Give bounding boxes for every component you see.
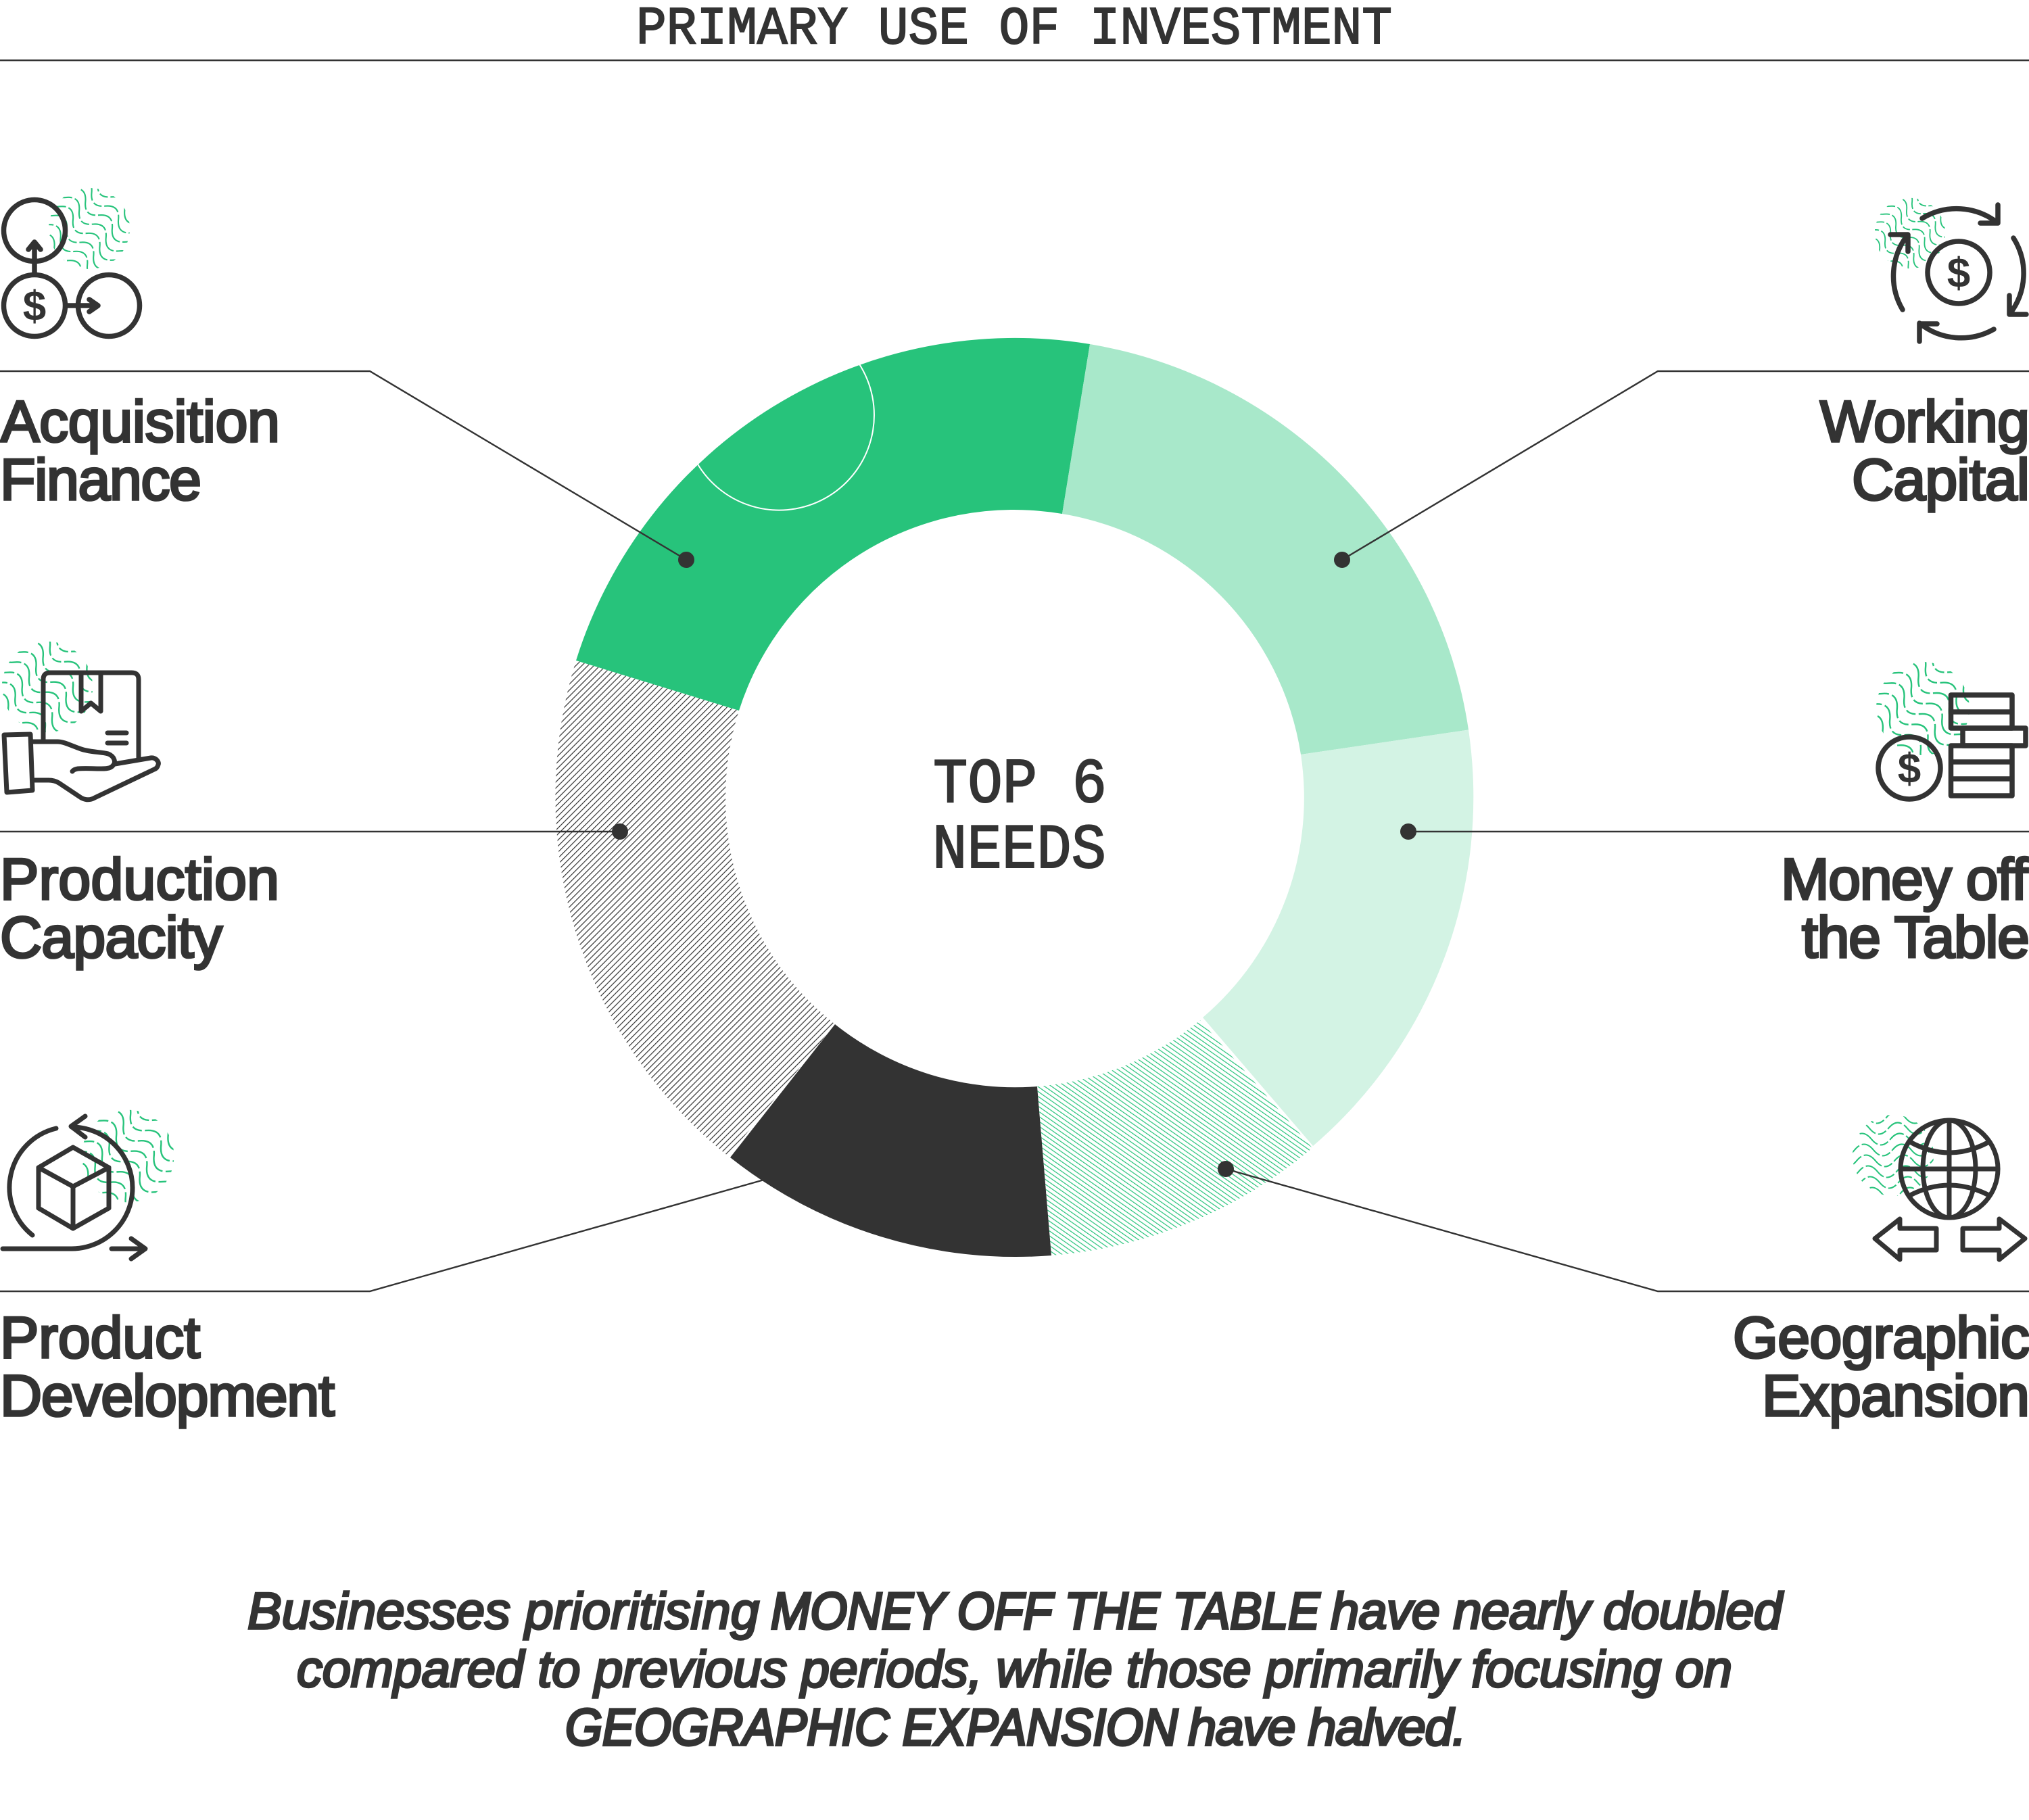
leader line: acquisition finance xyxy=(0,371,694,568)
label: production capacity: Production xyxy=(0,847,279,912)
segment arc decoration xyxy=(697,363,874,510)
leader line: product development xyxy=(0,1180,764,1291)
footnote text: MONEY OFF THE TABLE xyxy=(771,1583,1320,1640)
label: working capital: Working xyxy=(1820,389,2029,454)
label: acquisition finance: Finance xyxy=(0,448,201,512)
donut centre label: TOP 6 xyxy=(933,750,1107,821)
icon: working capital cycle xyxy=(1832,155,2026,341)
segment: money off the table xyxy=(1203,730,1473,1146)
label: acquisition finance xyxy=(0,389,280,512)
donut chart xyxy=(555,338,1473,1257)
leader line: working capital xyxy=(1334,371,2029,568)
label: acquisition finance: Acquisition xyxy=(1,389,280,454)
leader line: geographic expansion xyxy=(1218,1161,2029,1291)
icon: money off the table coins: $ xyxy=(1898,746,1921,792)
label: production capacity: Capacity xyxy=(0,905,222,970)
footnote text: have halved. xyxy=(1188,1699,1466,1756)
label: geographic expansion: Geographic xyxy=(1733,1306,2029,1370)
segment: product development xyxy=(730,1024,1051,1257)
icon: acquisition finance circles xyxy=(0,139,192,337)
icon: product development cube xyxy=(3,1055,245,1274)
leader line: money off the table xyxy=(1400,823,2029,840)
label: geographic expansion xyxy=(1733,1306,2029,1429)
donut centre label xyxy=(932,750,1107,887)
icon: working capital cycle: $ xyxy=(1947,250,1970,297)
segment: acquisition finance xyxy=(576,338,1090,711)
label: production capacity xyxy=(0,847,279,970)
leader line: production capacity xyxy=(0,823,628,840)
footnote text: Businesses prioritising xyxy=(247,1583,759,1640)
label: product development: Product xyxy=(0,1306,200,1370)
segment: working capital xyxy=(1062,344,1469,755)
label: working capital xyxy=(1820,389,2029,512)
footnote text: compared to previous periods, while those primarily focusing on xyxy=(297,1641,1732,1698)
icon: money off the table coins xyxy=(1820,606,2029,827)
label: product development xyxy=(0,1306,335,1429)
icon: geographic expansion globe xyxy=(1811,1111,2025,1260)
label: money off the table: Money off xyxy=(1781,847,2028,912)
segment: production capacity xyxy=(555,661,835,1156)
donut centre label: NEEDS xyxy=(932,815,1106,887)
label: geographic expansion: Expansion xyxy=(1762,1364,2029,1429)
title: PRIMARY USE OF INVESTMENT xyxy=(636,0,1392,59)
icon: production capacity hand and box xyxy=(0,587,163,803)
icon: acquisition finance circles: $ xyxy=(23,283,46,330)
footnote text: have nearly doubled xyxy=(1331,1583,1784,1640)
label: money off the table: the Table xyxy=(1802,905,2029,970)
label: money off the table xyxy=(1781,847,2029,970)
label: product development: Development xyxy=(0,1364,335,1429)
segment: geographic expansion xyxy=(1037,1020,1312,1255)
label: working capital: Capital xyxy=(1852,448,2029,512)
footnote text: GEOGRAPHIC EXPANSION xyxy=(565,1699,1178,1756)
footnote text xyxy=(247,1583,1784,1756)
